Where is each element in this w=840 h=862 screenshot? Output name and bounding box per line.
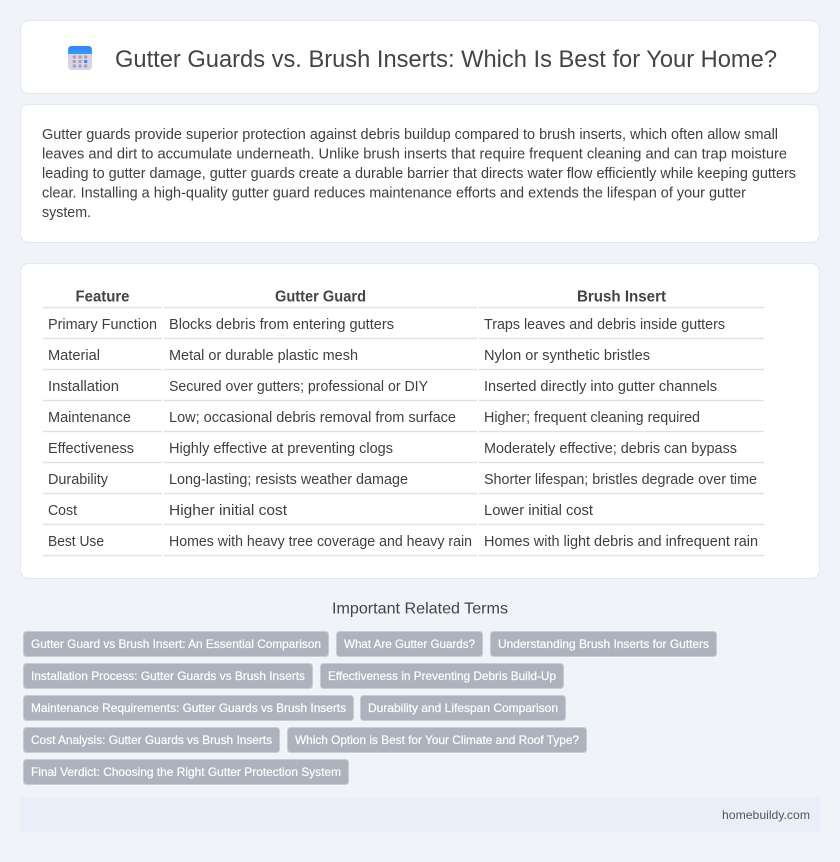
table row: installation: Secured over gutters; professional or DIY: [169, 379, 428, 395]
table row: primary function: Traps leaves and debris inside gutters: [484, 317, 725, 333]
panel: title header: [20, 20, 820, 94]
table row: installation: Installation: [48, 379, 119, 395]
title: Gutter Guards vs. Brush Inserts: Which Is Best for Your Home?: [115, 46, 777, 73]
table header row: Brush Insert: [577, 288, 666, 306]
tag: What Are Gutter Guards?: [344, 637, 475, 651]
table row: durability: [43, 472, 764, 494]
tag: Installation Process: Gutter Guards vs Brush Inserts: [31, 669, 305, 683]
tag: Effectiveness in Preventing Debris Build-Up: [328, 669, 556, 683]
panel: comparison table: [20, 264, 820, 578]
table row: best use: [43, 534, 764, 556]
tag: Cost Analysis: Gutter Guards vs Brush Inserts: [31, 733, 272, 747]
tag: [24, 760, 348, 784]
table row: cost: Cost: [48, 503, 77, 519]
tag: Final Verdict: Choosing the Right Gutter Protection System: [31, 765, 341, 779]
tag: Understanding Brush Inserts for Gutters: [498, 637, 709, 651]
tag: [360, 696, 566, 720]
tag: [24, 664, 312, 688]
table row: effectiveness: Highly effective at preventing clogs: [169, 441, 393, 457]
table row: material: Nylon or synthetic bristles: [484, 348, 650, 364]
tag: [336, 632, 482, 656]
table header row: Feature: [76, 288, 130, 306]
tag: Durability and Lifespan Comparison: [368, 701, 558, 715]
tag: [24, 696, 354, 720]
tag: [24, 728, 280, 752]
tag: [490, 632, 716, 656]
table row: maintenance: Low; occasional debris removal from surface: [169, 410, 456, 426]
text block: paragraph: leaves and dirt to accumulate underneath. Unlike brush inserts that require frequent cleaning and can trap moisture: [42, 146, 787, 162]
table row: cost: Higher initial cost: [169, 503, 287, 519]
table row: effectiveness: Moderately effective; debris can bypass: [484, 441, 737, 457]
table header row: [43, 288, 764, 308]
text block: paragraph: [42, 127, 796, 221]
tag: Gutter Guard vs Brush Insert: An Essential Comparison: [31, 637, 321, 651]
table row: installation: Inserted directly into gutter channels: [484, 379, 717, 395]
table row: durability: Long-lasting; resists weather damage: [169, 472, 408, 488]
icon: calendar: [68, 46, 92, 70]
table row: effectiveness: [43, 441, 764, 462]
table row: cost: Lower initial cost: [484, 503, 593, 519]
tag: [288, 728, 586, 752]
tag: [24, 632, 328, 656]
text block: paragraph: clear. Installing a high-quality gutter guard reduces maintenance efforts and extends the lifespan of your gutter: [42, 186, 746, 202]
text block: paragraph: system.: [42, 205, 91, 221]
table row: effectiveness: Effectiveness: [48, 441, 134, 457]
table row: best use: Homes with heavy tree coverage and heavy rain: [169, 534, 472, 550]
table row: durability: Shorter lifespan; bristles degrade over time: [484, 472, 757, 488]
panel: related term tags: [24, 632, 716, 784]
table row: best use: Best Use: [48, 534, 104, 550]
text block: paragraph: Gutter guards provide superior protection against debris buildup compared to brush inserts, which often allow small: [42, 127, 778, 143]
tag: Maintenance Requirements: Gutter Guards vs Brush Inserts: [31, 701, 346, 715]
table row: primary function: Blocks debris from entering gutters: [169, 317, 394, 333]
table row: material: [43, 348, 764, 370]
table row: durability: Durability: [48, 472, 109, 488]
table row: primary function: [43, 317, 764, 338]
table row: material: Metal or durable plastic mesh: [169, 348, 358, 364]
table row: material: Material: [48, 348, 100, 364]
panel: introduction paragraph: [20, 104, 820, 242]
table row: maintenance: Maintenance: [48, 410, 131, 426]
tag: [320, 664, 564, 688]
text block: paragraph: leading to gutter damage, gutter guards create a durable barrier that directs water flow efficiently while keeping gutters: [42, 166, 796, 182]
tag: Which Option is Best for Your Climate and Roof Type?: [295, 733, 579, 747]
table row: installation: [43, 379, 764, 400]
table header row: Gutter Guard: [275, 288, 366, 306]
table row: best use: Homes with light debris and infrequent rain: [484, 534, 758, 550]
table row: maintenance: [43, 410, 764, 432]
footer: [20, 798, 820, 832]
heading: important related terms: Important Related Terms: [332, 600, 508, 618]
table row: primary function: Primary Function: [48, 317, 157, 333]
table row: maintenance: Higher; frequent cleaning required: [484, 410, 700, 426]
table row: cost: [43, 503, 764, 524]
footer source text: homebuildy.com: [722, 808, 810, 822]
